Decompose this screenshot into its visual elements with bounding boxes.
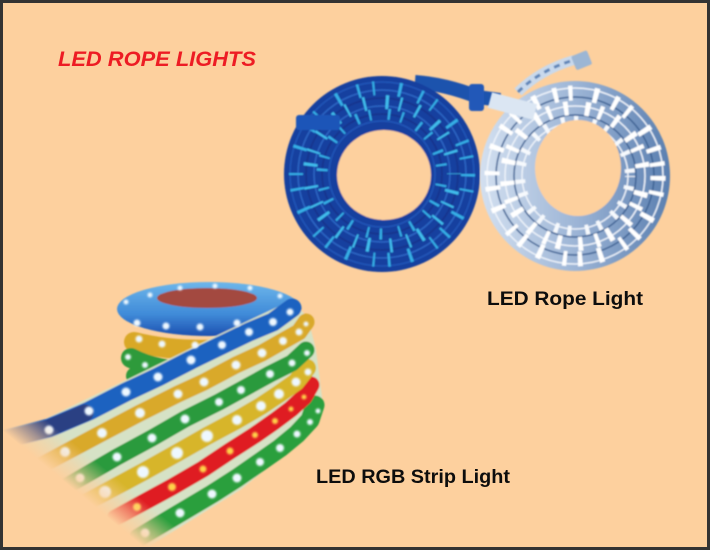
strip faded end [3, 400, 213, 547]
blue plugs [296, 115, 340, 130]
label: LED Rope Light: LED Rope Light [487, 289, 644, 310]
white coil glowing LEDs [492, 93, 658, 259]
white coil body [480, 81, 670, 271]
white rope light coil [480, 50, 670, 271]
blue coil hole [337, 130, 431, 220]
blue coil glowing LEDs [296, 88, 468, 260]
strip LED glows [44, 284, 320, 538]
blue connector tube [415, 82, 500, 100]
strip bands [7, 282, 323, 547]
RGB strip light coil [3, 282, 323, 547]
blue rope light coil [284, 76, 500, 272]
white coil hole [535, 120, 621, 216]
blue coil body [284, 76, 480, 272]
title: LED ROPE LIGHTS [58, 48, 256, 71]
white rope tail and plug [490, 100, 535, 112]
red strip LEDs [133, 394, 306, 511]
label: LED RGB Strip Light: LED RGB Strip Light [316, 467, 511, 488]
